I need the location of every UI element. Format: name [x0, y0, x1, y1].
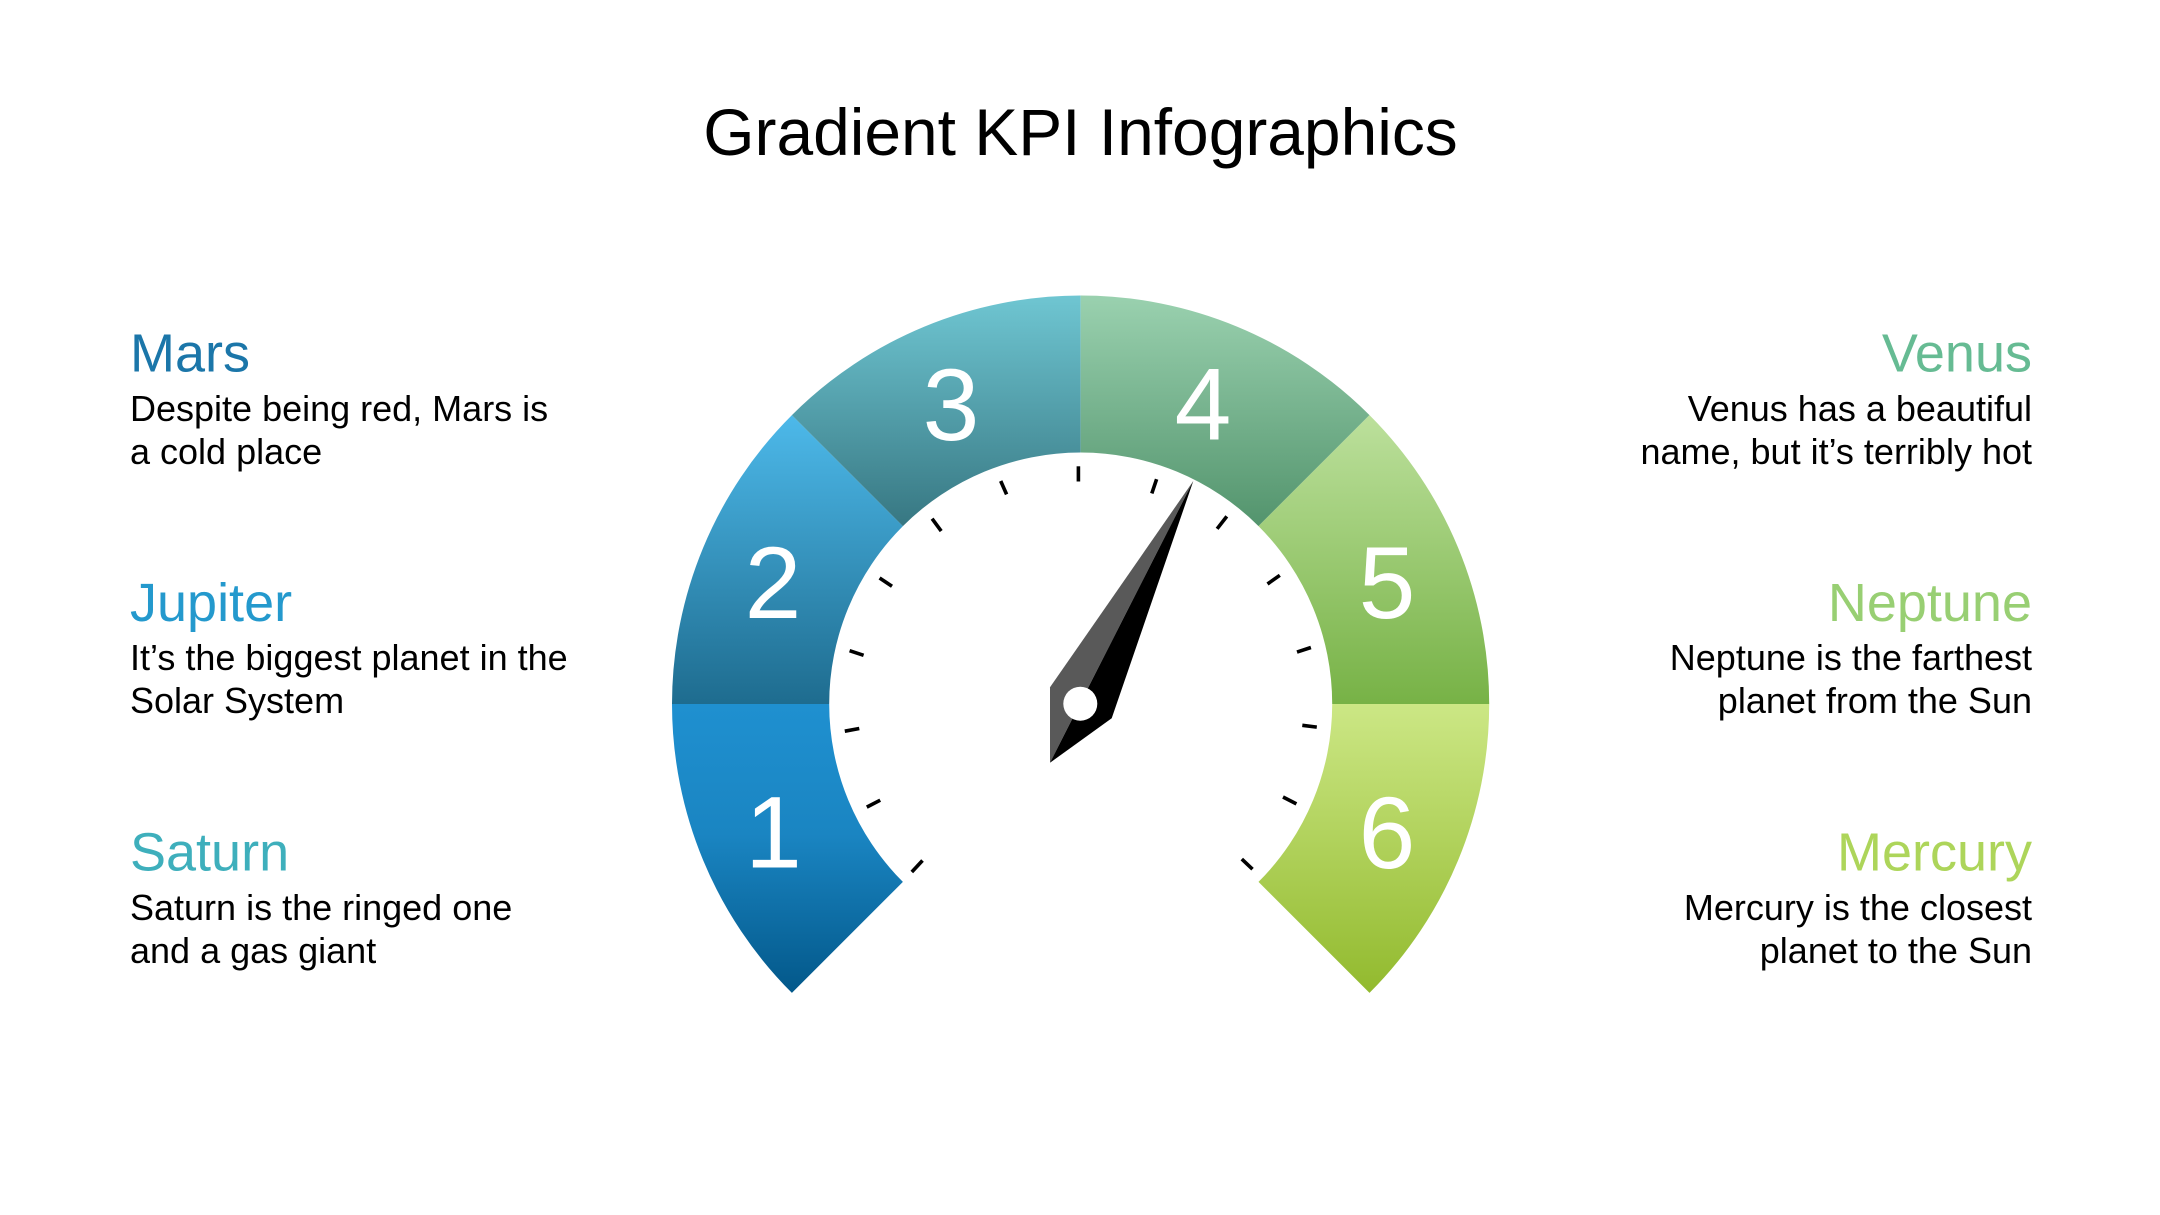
- segment 3: [792, 296, 1081, 526]
- text block: Mars: [130, 324, 548, 472]
- segment 3: 3: [923, 348, 979, 462]
- text block: Jupiter: It’s the biggest planet in the: [130, 637, 568, 678]
- segment 1: [672, 704, 903, 993]
- text block: Mercury: Mercury: [1837, 822, 2032, 882]
- right text column: [1640, 324, 2032, 971]
- text block: Neptune: Neptune is the farthest: [1670, 637, 2032, 678]
- text block: Saturn: Saturn is the ringed one: [130, 887, 512, 928]
- text block: Mercury: planet to the Sun: [1760, 930, 2032, 971]
- text block: Saturn: [130, 822, 512, 971]
- segment 4: [1081, 296, 1370, 526]
- text block: Saturn: Saturn: [130, 822, 289, 882]
- text block: Neptune: Neptune: [1828, 573, 2032, 633]
- segment 5: [1258, 415, 1489, 704]
- text block: Neptune: planet from the Sun: [1718, 680, 2032, 721]
- text block: Jupiter: [130, 573, 568, 721]
- text block: Venus: name, but it’s terribly hot: [1640, 431, 2032, 472]
- text block: Mercury: [1684, 822, 2032, 971]
- segment 6: 6: [1359, 776, 1415, 890]
- segment 6: [1258, 704, 1489, 993]
- segment 2: 2: [745, 526, 801, 640]
- text block: Mars: Despite being red, Mars is: [130, 388, 548, 429]
- segment 5: 5: [1359, 526, 1415, 640]
- text block: Mars: Mars: [130, 324, 250, 384]
- text block: Venus: [1640, 324, 2032, 472]
- segment 1: 1: [745, 776, 802, 890]
- segment 2: [672, 415, 903, 704]
- segment 4: 4: [1175, 348, 1231, 462]
- text block: Jupiter: Solar System: [130, 680, 344, 721]
- tick marks: [845, 466, 1317, 872]
- text block: Venus: Venus: [1882, 324, 2032, 384]
- title: Gradient KPI Infographics: [703, 95, 1458, 169]
- text block: Venus: Venus has a beautiful: [1688, 388, 2032, 429]
- text block: Jupiter: Jupiter: [130, 573, 292, 633]
- needle: [1050, 481, 1193, 763]
- text block: Mercury: Mercury is the closest: [1684, 887, 2032, 928]
- text block: Mars: a cold place: [130, 431, 322, 472]
- gauge: [672, 296, 1489, 993]
- text block: Saturn: and a gas giant: [130, 930, 376, 971]
- left text column: [130, 324, 568, 971]
- text block: Neptune: [1670, 573, 2032, 721]
